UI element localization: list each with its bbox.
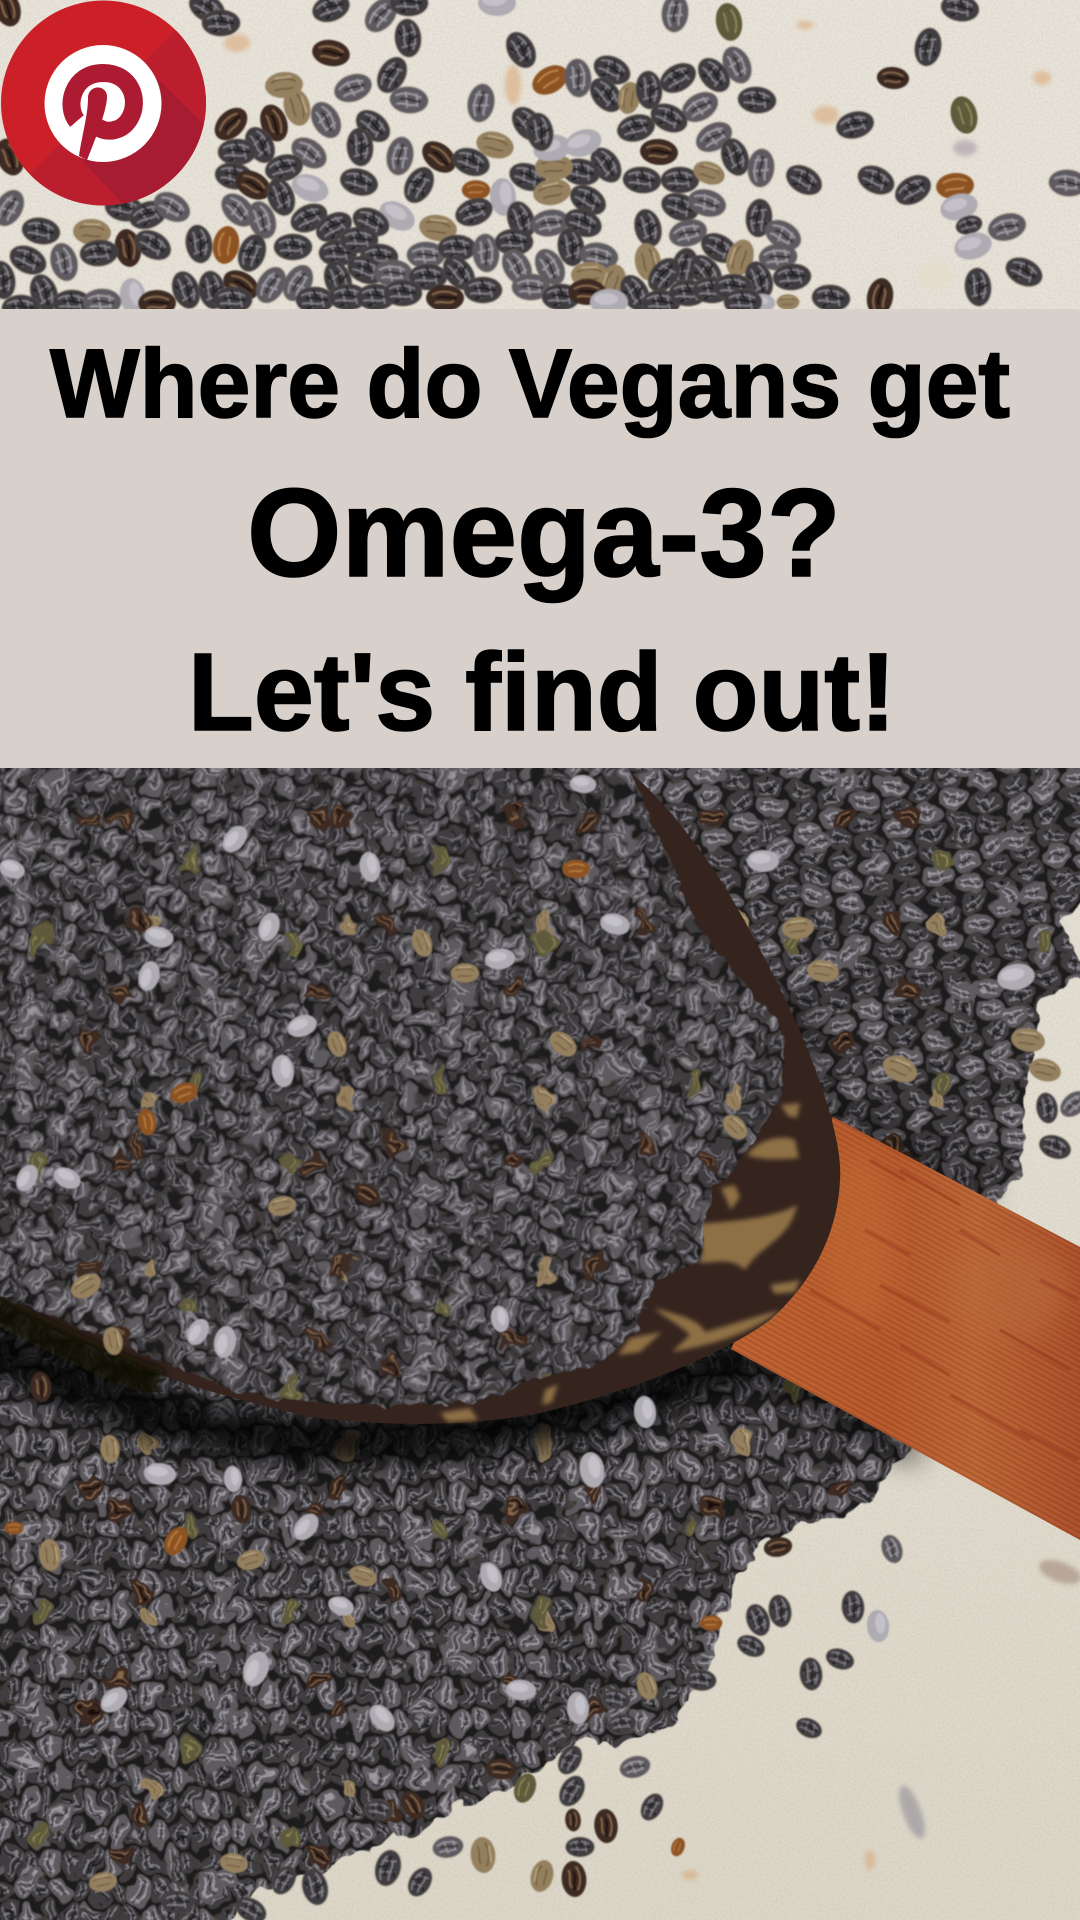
highlighted pale and tan seeds (0, 774, 1037, 1894)
shadowed left end of the spoon rim (0, 1305, 160, 1384)
loose seeds around the piles (161, 1026, 1080, 1920)
heading line: Omega-3?: Omega-3? (247, 464, 841, 603)
icon: Pinterest logo badge (1, 0, 206, 206)
chia seeds heaped in the spoon (0, 750, 820, 1430)
scattered chia seeds above the title band (0, 0, 1080, 322)
heading line: Where do Vegans get: Where do Vegans get (50, 329, 1010, 438)
spoon tan wood grain patches (440, 1103, 800, 1422)
wooden spoon bowl (0, 769, 840, 1424)
chia seed pile: lower left mass (0, 1300, 912, 1920)
spoon handle (731, 1117, 1080, 1540)
shadow cast by the spoon (0, 1000, 985, 1450)
heading line: Let's find out!: Let's find out! (188, 631, 896, 754)
title band panel (0, 309, 1080, 768)
chia seed pile: upper right mass (627, 768, 1080, 1204)
